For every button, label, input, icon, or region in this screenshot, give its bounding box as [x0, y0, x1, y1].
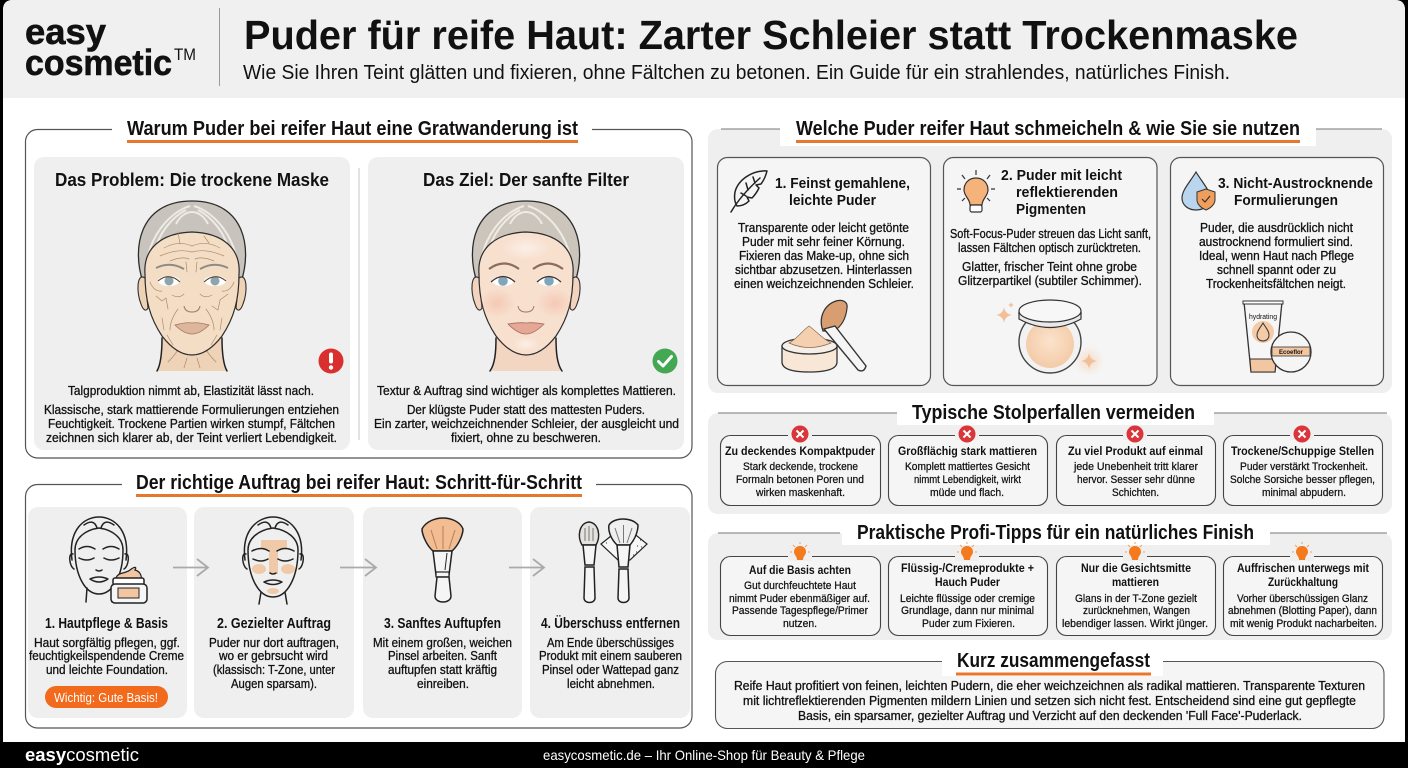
- card text: [1230, 446, 1375, 499]
- step text: [539, 636, 682, 691]
- icon: face with T-zone: [243, 517, 303, 604]
- subtitle: Wie Sie Ihren Teint glätten und fixieren, ohne Fältchen zu betonen. Ein Guide für ein strahlendes, natürliches Finish.: [243, 62, 1230, 84]
- card text: [898, 446, 1037, 499]
- step 2: [194, 507, 354, 718]
- card title: reflektierenden: [1016, 184, 1118, 201]
- logo: easy: [25, 11, 106, 52]
- heading: Kurz zusammengefasst: Kurz zusammengefasst: [957, 650, 1150, 672]
- pitfall card 3: [1056, 426, 1216, 506]
- card text: lebendiger lassen. Wirkt jünger.: [1062, 618, 1208, 630]
- callout: Wichtig: Wichtig: Gute Basis!: [54, 690, 158, 705]
- heading: Profi-Tipps: Praktische Profi-Tipps für ein natürliches Finish: [857, 522, 1254, 544]
- card text: austrocknend formuliert sind.: [1199, 235, 1353, 249]
- card 2: reflektierende Pigmente: [944, 158, 1157, 386]
- footer logo: easycosmetic: [25, 745, 139, 765]
- card title: Formulierungen: [1234, 192, 1338, 209]
- step text: [29, 636, 184, 677]
- card text: mit wenig Produkt nacharbeiten.: [1230, 618, 1377, 630]
- icon: red x: [1294, 426, 1310, 442]
- card text: Leichte flüssige oder cremige: [900, 593, 1035, 605]
- step text: [373, 636, 512, 691]
- card text: Glans in der T-Zone gezielt: [1075, 593, 1197, 605]
- footer shop line: easycosmetic.de – Ihr Online-Shop für Beauty & Pflege: [543, 747, 865, 763]
- icon: orange bulb: [957, 542, 977, 560]
- panel: Kurz zusammengefasst: [716, 650, 1384, 728]
- card text: Solche Sorsiche besser pflegen,: [1230, 474, 1375, 486]
- pitfall card 1: [720, 426, 880, 506]
- step text: (klassisch: T-Zone, unter: [213, 663, 335, 677]
- section: Profi-Tipps: [708, 522, 1392, 640]
- card text: Schichten.: [1112, 487, 1159, 499]
- text: goal description: [374, 384, 679, 445]
- card text: Fixieren das Make-up, ohne sich: [739, 249, 909, 263]
- step 3: [363, 507, 522, 718]
- step text: leicht abnehmen.: [567, 677, 655, 691]
- wrinkles and dry cracks: [150, 232, 234, 345]
- icon: green check: [652, 348, 678, 374]
- step text: Pinsel oder Wattepad ganz: [542, 663, 679, 677]
- pitfall card 2: [888, 426, 1048, 506]
- step text: Pinsel arbeiten. Sanft: [388, 649, 497, 663]
- icon: feather: [731, 171, 767, 212]
- card text: Zu viel Produkt auf einmal: [1068, 446, 1203, 458]
- header band: [3, 0, 1405, 98]
- panel: Das Problem: [34, 157, 350, 450]
- step text: auftupfen statt kräftig: [388, 663, 497, 677]
- pitfall card 4: [1224, 426, 1382, 506]
- text: problem description: Feuchtigkeit. Trockene Partien wirken stumpf, Fältchen: [48, 417, 335, 431]
- card text: Auf die Basis achten: [749, 565, 851, 577]
- footer: [0, 742, 1408, 768]
- card text: Puder verstärkt Trockenheit.: [1240, 461, 1368, 473]
- panel: Das Ziel: [368, 157, 684, 450]
- card text: [725, 446, 875, 499]
- card text: Zurückhaltung: [1268, 577, 1338, 589]
- card text: Flüssig-/Cremeprodukte +: [901, 563, 1034, 575]
- heading: Das Problem: Das Problem: Die trockene Maske: [55, 170, 329, 190]
- card title: [1218, 175, 1373, 209]
- logo: cosmetic: [25, 42, 172, 83]
- card text: Puder, die ausdrücklich nicht: [1200, 221, 1354, 235]
- card text: Stark deckende, trockene: [743, 461, 858, 473]
- step 1: [28, 507, 187, 718]
- card text: Passende Tagespflege/Primer: [732, 605, 868, 617]
- text: problem description: [44, 384, 339, 445]
- icon: hydrating tube and puff: hydrating: [1249, 314, 1277, 321]
- card text: [1068, 446, 1203, 499]
- heading: Das Ziel: Das Ziel: Der sanfte Filter: [423, 170, 629, 190]
- card text: Trockene/Schuppige Stellen: [1231, 446, 1374, 458]
- text: problem description: Klassische, stark mattierende Formulierungen entziehen: [44, 403, 339, 417]
- heading: Schritt-für-Schritt: Der richtige Auftrag bei reifer Haut: Schritt-für-Schritt: [136, 472, 582, 494]
- card text: Grundlage, dann nur minimal: [901, 605, 1034, 617]
- icon: loose powder jar and brush: [782, 300, 866, 372]
- card text: hervor. Sesser sehr dünne: [1077, 474, 1195, 486]
- tip card 4: [1224, 542, 1382, 636]
- step text: einreiben.: [417, 677, 469, 691]
- card text: Auffrischen unterwegs mit: [1237, 563, 1369, 575]
- step text: Mit einem großen, weichen: [373, 636, 512, 650]
- arrow 2: [340, 559, 376, 576]
- icon: red x: [958, 426, 976, 442]
- card text: [900, 563, 1035, 630]
- step title: 1. Hautpflege & Basis: [45, 616, 168, 632]
- step text: wo er gebrsucht wird: [218, 649, 328, 663]
- illustration: aged dry face: [138, 201, 246, 371]
- icon: face with cream jar: [70, 517, 147, 603]
- card text: Großflächig stark mattieren: [898, 446, 1037, 458]
- card text: müde und flach.: [930, 487, 1004, 499]
- card text: [1062, 563, 1208, 630]
- card text: Glatter, frischer Teint ohne grobe: [962, 260, 1137, 274]
- icon: powder brush: [422, 518, 463, 602]
- icon: light bulb: [957, 170, 995, 212]
- step text: feuchtigkeilspendende Creme: [29, 649, 184, 663]
- title: Puder für reife Haut: Zarter Schleier statt Trockenmaske: [244, 12, 1298, 58]
- step text: Haut sorgfältig pflegen, ggf.: [34, 636, 180, 650]
- card text: [729, 565, 870, 630]
- card 3: nicht-austrocknende Formulierungen: [1170, 158, 1384, 386]
- summary text: Basis, ein sparsamer, gezielter Auftrag und Verzicht auf den deckenden 'Full Face'-Puderlack.: [798, 709, 1302, 723]
- icon: hydrating tube and puff: Ecoeflor: [1279, 350, 1304, 356]
- card text: Transparente oder leicht getönte: [738, 221, 909, 235]
- step text: [209, 636, 339, 691]
- card text: minimal abpudern.: [1262, 487, 1346, 499]
- step title: 3. Sanftes Auftupfen: [384, 616, 501, 632]
- callout: Wichtig: [45, 686, 168, 708]
- card title: Pigmenten: [1016, 201, 1086, 218]
- card text: jede Unebenheit tritt klarer: [1073, 461, 1198, 473]
- card text: nimmt Lebendigkeit, wirkt: [914, 474, 1021, 486]
- icon: red x: [1126, 426, 1144, 442]
- card text: Zu deckendes Kompaktpuder: [725, 446, 875, 458]
- card text: [950, 227, 1151, 288]
- card text: Komplett mattiertes Gesicht: [905, 461, 1030, 473]
- card text: zurücknehmen, Wangen: [1083, 605, 1190, 617]
- step text: Am Ende überschüssiges: [547, 636, 674, 650]
- panel: Warum Puder: [26, 118, 692, 458]
- text: problem description: Talgproduktion nimmt ab, Elastizität lässt nach.: [68, 384, 314, 398]
- card text: lassen Fältchen optisch zurücktreten.: [958, 241, 1141, 255]
- soft cheek blush and highlights: [478, 236, 574, 351]
- card text: Hauch Puder: [935, 577, 1000, 589]
- card text: Formaln betonen Poren und: [736, 474, 864, 486]
- step 4: [530, 507, 690, 718]
- section: Typische Stolperfallen: [708, 402, 1392, 514]
- icon: red x: [792, 426, 808, 442]
- step title: 2. Gezielter Auftrag: [217, 616, 331, 632]
- tip card 1: [720, 542, 880, 636]
- text: goal description: fixiert, ohne zu beschweren.: [451, 431, 601, 445]
- card text: [1199, 221, 1354, 291]
- card text: sichtbar abzusetzen. Hinterlassen: [735, 263, 912, 277]
- step text: Puder nur dort auftragen,: [209, 636, 339, 650]
- icon: water drop with shield: [1182, 172, 1215, 210]
- card text: Ideal, wenn Haut nach Pflege: [1199, 249, 1354, 263]
- step text: Augen sparsam).: [231, 677, 317, 691]
- card text: schnell spannt oder zu: [1217, 263, 1336, 277]
- text: goal description: Textur & Auftrag sind wichtiger als komplettes Mattieren.: [377, 384, 676, 398]
- heading: Welche Puder: Welche Puder reifer Haut schmeicheln & wie Sie sie nutzen: [796, 118, 1300, 140]
- text: goal description: Der klügste Puder statt des mattesten Puders.: [407, 403, 645, 417]
- icon: red warning: [318, 348, 344, 374]
- icon: two brushes and blotting pad: [579, 519, 647, 602]
- step text: und leichte Foundation.: [46, 663, 168, 677]
- section: Welche Puder: [708, 116, 1392, 393]
- card text: Vorher überschüssigen Glanz: [1237, 593, 1368, 605]
- step title: 4. Überschuss entfernen: [541, 615, 680, 632]
- heading: Gratwanderung: Warum Puder bei reifer Haut eine Gratwanderung ist: [127, 118, 578, 140]
- card text: [1228, 563, 1377, 630]
- card text: nimmt Puder ebenmäßiger auf.: [729, 593, 870, 605]
- text: goal description: Ein zarter, weichzeichnender Schleier, der ausgleicht und: [374, 417, 679, 431]
- icon: orange bulb: [1292, 542, 1312, 560]
- card text: [734, 221, 914, 291]
- card text: nutzen.: [783, 618, 817, 630]
- card text: Soft-Focus-Puder streuen das Licht sanft,: [950, 227, 1151, 241]
- card title: 3. Nicht-Austrocknende: [1218, 175, 1373, 192]
- arrow 3: [509, 559, 544, 576]
- summary text: [734, 679, 1365, 723]
- card text: Puder zum Fixieren.: [922, 618, 1015, 630]
- card text: einen weichzeichnenden Schleier.: [734, 277, 914, 291]
- icon: orange bulb: [790, 542, 810, 560]
- summary text: Reife Haut profitiert von feinen, leichten Pudern, die eher weichzeichnen als radikal mattieren. Transparente Texturen: [734, 679, 1365, 693]
- card text: Trockenheitsfältchen neigt.: [1206, 277, 1346, 291]
- card text: Nur die Gesichtsmitte: [1081, 563, 1191, 575]
- card text: Puder mit sehr feiner Körnung.: [742, 235, 905, 249]
- card title: 2. Puder mit leicht: [1001, 167, 1122, 184]
- icon: hydrating tube and puff: [1243, 301, 1311, 372]
- icon: orange bulb: [1125, 542, 1145, 560]
- icon: pressed powder compact: [996, 300, 1104, 376]
- card text: wirken maskenhaft.: [755, 487, 845, 499]
- logo: TM: [174, 45, 196, 64]
- arrow 1: [173, 559, 208, 576]
- card title: [775, 175, 910, 209]
- panel: Der richtige Auftrag: [26, 472, 692, 728]
- summary text: mit lichtreflektierenden Pigmenten mildern Linien und setzen sich nicht fest. Entscheidend sind eine gut gepflegte: [743, 694, 1356, 708]
- tip card 3: [1056, 542, 1216, 636]
- card text: Glitzerpartikel (subtiler Schimmer).: [958, 274, 1142, 288]
- tip card 2: [888, 542, 1048, 636]
- text: problem description: zeichnen sich klarer ab, der Teint verliert Lebendigkeit.: [46, 431, 337, 445]
- card title: leichte Puder: [789, 192, 876, 209]
- card text: mattieren: [1112, 577, 1159, 589]
- card text: abnehmen (Blotting Paper), dann: [1228, 605, 1377, 617]
- heading: Stolperfallen: Typische Stolperfallen vermeiden: [912, 402, 1195, 424]
- card text: Gut durchfeuchtete Haut: [744, 580, 856, 592]
- illustration: smooth radiant face: [472, 201, 580, 371]
- step text: Produkt mit einem sauberen: [539, 649, 682, 663]
- card title: 1. Feinst gemahlene,: [775, 175, 910, 192]
- card 1: feinst gemahlene Puder: [718, 158, 930, 386]
- logo: [25, 11, 196, 83]
- card title: [1001, 167, 1122, 218]
